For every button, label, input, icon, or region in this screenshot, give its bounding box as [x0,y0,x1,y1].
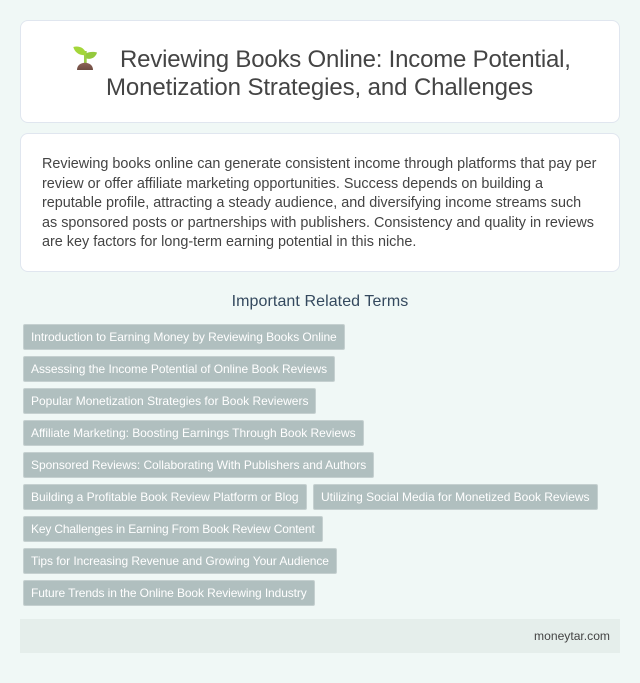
tag: Key Challenges in Earning From Book Review Content [31,522,315,536]
panel: title card [20,20,620,123]
footer source: moneytar.com [534,629,610,643]
tag [23,356,335,382]
text: Monetization Strategies, and Challenges [106,74,533,101]
heading: related terms: Important Related Terms [232,293,408,310]
icon: seedling [73,46,97,70]
tag [23,420,364,446]
tag: Affiliate Marketing: Boosting Earnings Through Book Reviews [31,426,356,440]
footer bar [20,619,620,653]
tag [23,580,315,606]
summary text: as sponsored posts or partnerships with publishers. Consistency and quality in reviews [42,214,594,230]
title: Reviewing Books Online: Income Potential, [120,46,571,73]
tag: Introduction to Earning Money by Reviewing Books Online [31,330,337,344]
tag: Future Trends in the Online Book Reviewing Industry [31,586,307,600]
tag [23,484,307,510]
summary text [42,156,596,250]
tag: Popular Monetization Strategies for Book Reviewers [31,394,308,408]
tag: Sponsored Reviews: Collaborating With Publishers and Authors [31,458,366,472]
panel: summary card [20,133,620,272]
summary text: are key factors for long-term earning potential in this niche. [42,234,416,250]
tag [23,548,337,574]
tag: Assessing the Income Potential of Online Book Reviews [31,362,327,376]
tag [23,324,345,350]
tag: Tips for Increasing Revenue and Growing Your Audience [31,554,329,568]
tag [23,516,323,542]
tag [313,484,598,510]
summary text: review or offer affiliate marketing opportunities. Success depends on building a [42,176,543,192]
tag [23,388,316,414]
summary text: reputable profile, attracting a steady audience, and diversifying income streams such [42,195,581,211]
tag: Utilizing Social Media for Monetized Book Reviews [321,490,589,504]
tag: Building a Profitable Book Review Platform or Blog [31,490,298,504]
summary text: Reviewing books online can generate consistent income through platforms that pay per [42,156,596,172]
tag [23,452,374,478]
